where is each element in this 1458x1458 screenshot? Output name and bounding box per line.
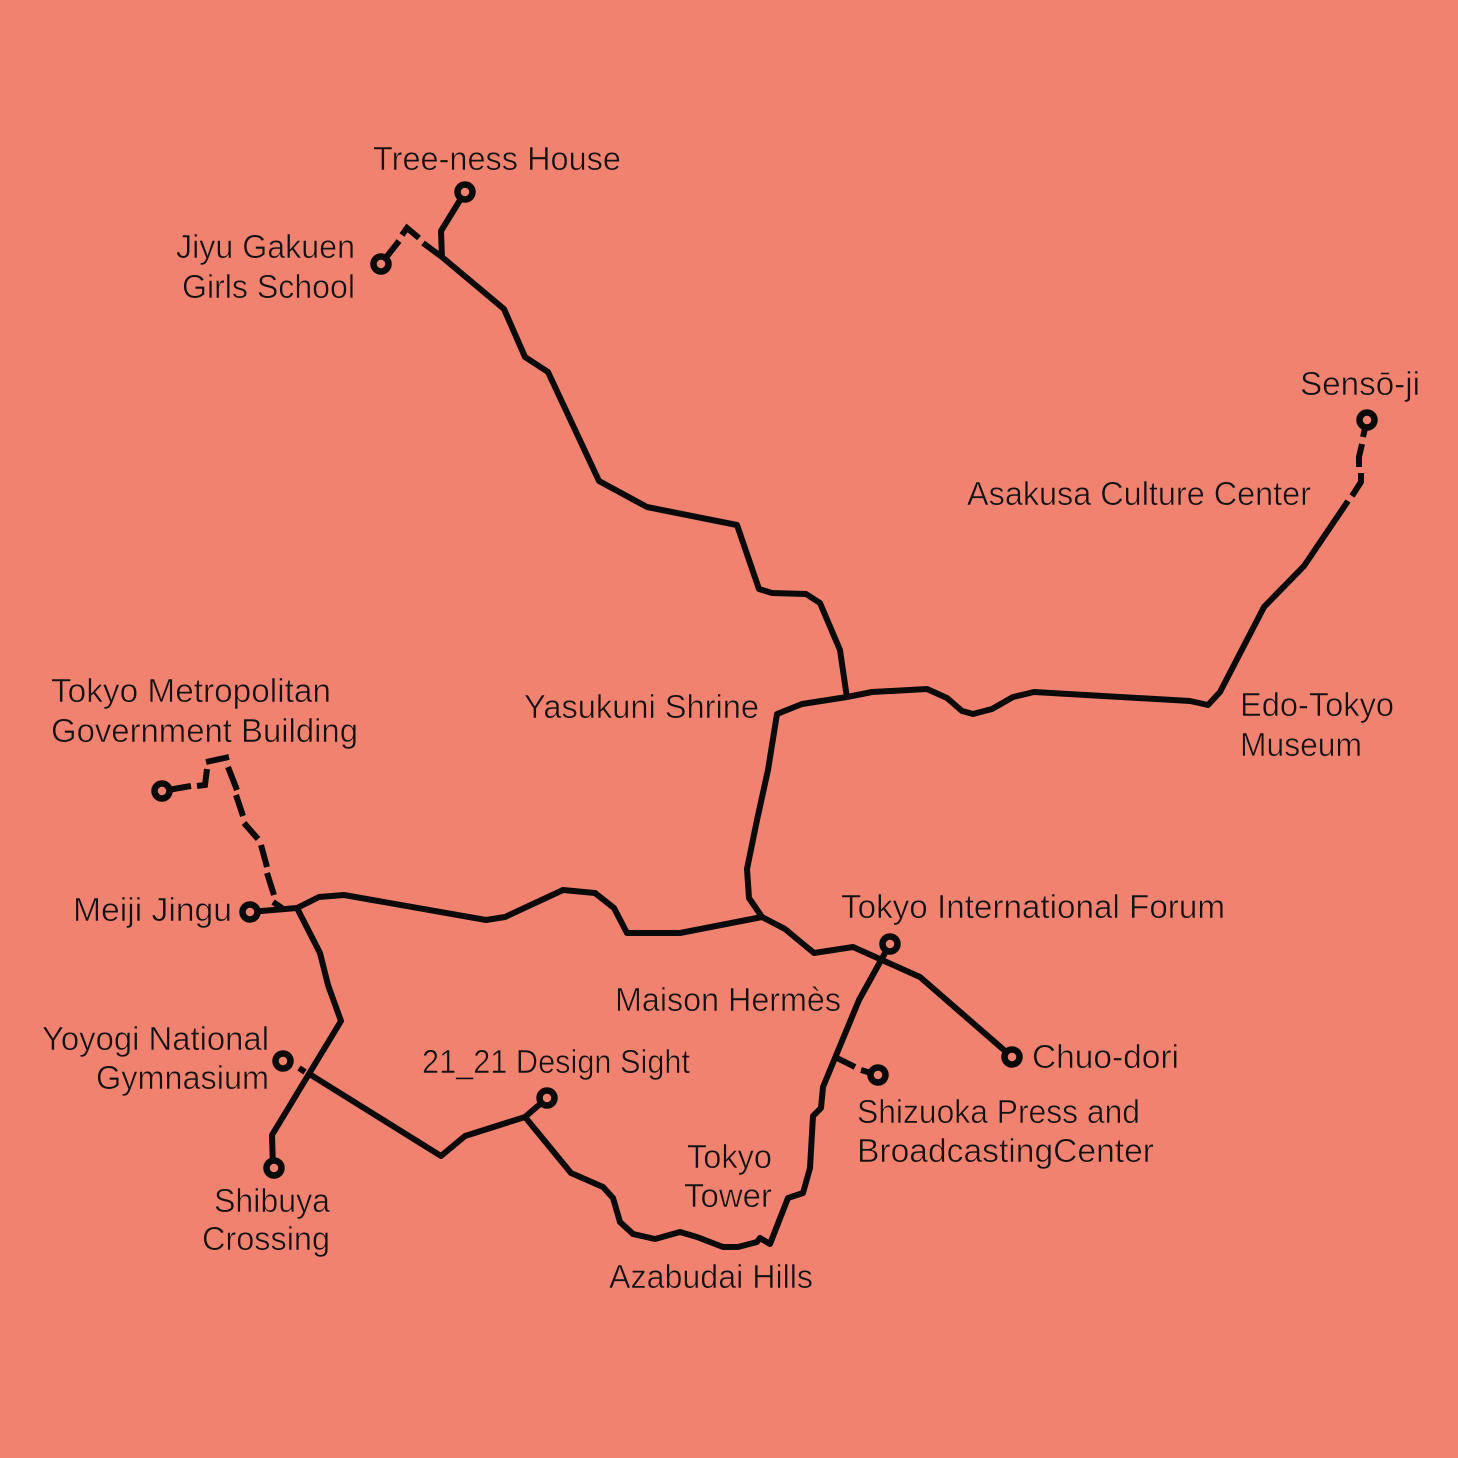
station labels: Asakusa Culture Center <box>967 475 1311 512</box>
station labels: Yasukuni Shrine <box>524 688 759 725</box>
solid route lines <box>250 192 1348 1247</box>
station labels: Girls School <box>182 268 355 305</box>
station labels: Gymnasium <box>96 1059 269 1096</box>
station labels: Tokyo Metropolitan <box>51 672 331 709</box>
station labels: BroadcastingCenter <box>857 1132 1154 1169</box>
station labels: Shizuoka Press and <box>857 1093 1140 1130</box>
station labels: Jiyu Gakuen <box>176 228 355 265</box>
station labels: Tokyo International Forum <box>841 888 1225 925</box>
station labels: Tower <box>684 1177 772 1214</box>
station labels <box>42 140 1420 1295</box>
station labels: Meiji Jingu <box>73 891 232 928</box>
station labels: Yoyogi National <box>42 1020 269 1057</box>
station labels: Chuo-dori <box>1032 1038 1179 1075</box>
station labels: Azabudai Hills <box>609 1258 813 1295</box>
station labels: Tokyo <box>687 1138 772 1175</box>
station labels: Tree-ness House <box>373 140 621 177</box>
dashed route lines <box>162 228 1367 1075</box>
station labels: Shibuya <box>214 1182 331 1219</box>
station labels: Edo-Tokyo <box>1240 686 1394 723</box>
station markers <box>154 184 1374 1176</box>
station labels: Maison Hermès <box>615 981 841 1018</box>
station labels: 21_21 Design Sight <box>422 1043 690 1080</box>
station labels: Crossing <box>202 1220 330 1257</box>
station labels: Sensō-ji <box>1300 365 1420 402</box>
station labels: Museum <box>1240 726 1362 763</box>
station labels: Government Building <box>51 712 358 749</box>
